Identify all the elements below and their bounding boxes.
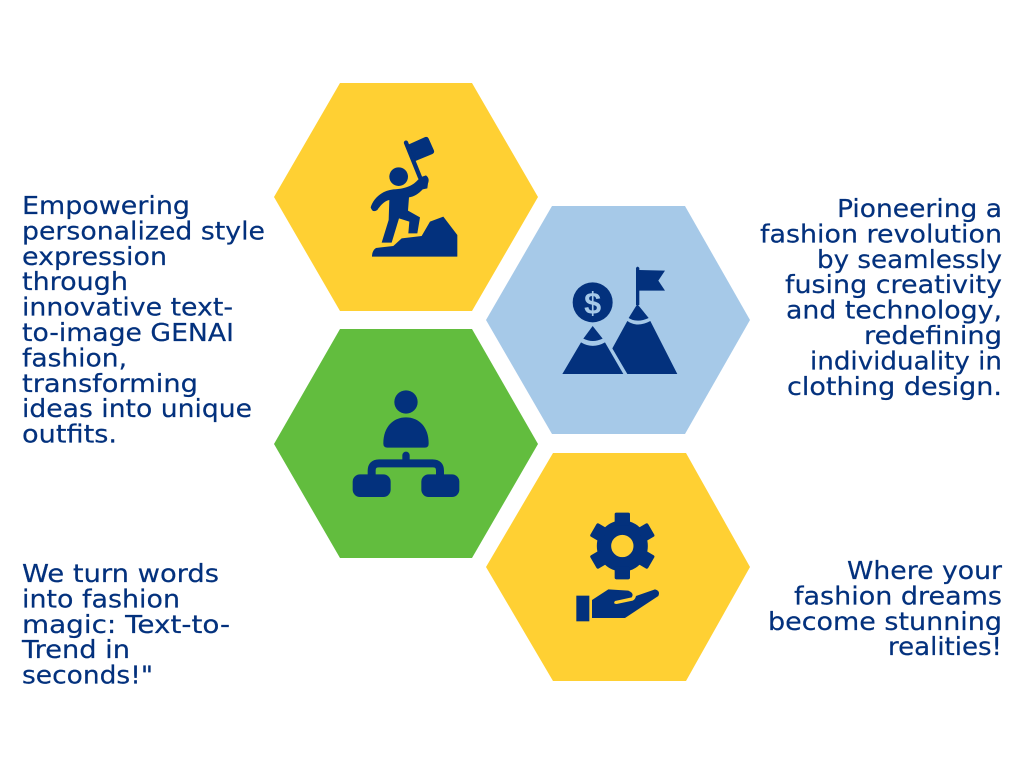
panel: top yellow hexagon with climber bbox=[274, 83, 538, 311]
icon: person climbing with flag bbox=[371, 137, 457, 257]
hexagon: top yellow bbox=[274, 83, 538, 311]
text block: where your fashion dreams: fashion dreams bbox=[794, 581, 1002, 610]
text block: empowering personalized style: innovative text- bbox=[22, 293, 233, 322]
hexagon: green bbox=[274, 329, 538, 558]
icon: mountains with flag and dollar coin bbox=[562, 267, 677, 374]
text block: where your fashion dreams bbox=[768, 556, 1003, 661]
text block: empowering personalized style: transforming bbox=[22, 369, 198, 398]
text block: empowering personalized style: through bbox=[22, 267, 128, 296]
text block: empowering personalized style: to-image GENAI bbox=[22, 318, 234, 347]
panel: blue hexagon with mountains bbox=[486, 206, 750, 434]
text block: empowering personalized style: personalized style bbox=[22, 216, 265, 245]
text block: we turn words into fashion magic: Trend in bbox=[21, 635, 130, 664]
text block: pioneering a fashion revolution: and technology, bbox=[786, 296, 1002, 325]
icon: gear over open hand bbox=[576, 513, 659, 621]
text block: empowering personalized style: fashion, bbox=[22, 343, 127, 372]
text block: pioneering a fashion revolution bbox=[760, 194, 1002, 401]
text block: pioneering a fashion revolution: redefining bbox=[864, 321, 1002, 350]
text block: pioneering a fashion revolution: clothing design. bbox=[787, 372, 1002, 401]
text block: pioneering a fashion revolution: fashion revolution bbox=[760, 219, 1002, 248]
text block: where your fashion dreams: realities! bbox=[888, 632, 1002, 661]
text block: empowering personalized style: Empowering bbox=[22, 191, 190, 220]
text block: pioneering a fashion revolution: by seamlessly bbox=[817, 245, 1002, 274]
text block: empowering personalized style: ideas into unique bbox=[22, 394, 252, 423]
text block: we turn words into fashion magic: We turn words bbox=[22, 559, 219, 588]
panel: green hexagon with hierarchy bbox=[274, 329, 538, 558]
hexagon: blue bbox=[486, 206, 750, 434]
text block: where your fashion dreams: become stunning bbox=[768, 607, 1002, 636]
icon: mountains with flag and dollar coin: $ bbox=[584, 286, 601, 320]
text block: pioneering a fashion revolution: individuality in bbox=[810, 346, 1002, 375]
text block: empowering personalized style: expression bbox=[22, 242, 167, 271]
text block: empowering personalized style bbox=[22, 191, 265, 449]
text block: we turn words into fashion magic: into fashion bbox=[22, 584, 180, 613]
text block: we turn words into fashion magic bbox=[21, 559, 230, 690]
text block: pioneering a fashion revolution: fusing creativity bbox=[785, 270, 1002, 299]
text block: where your fashion dreams: Where your bbox=[847, 556, 1003, 585]
panel: bottom yellow hexagon with gear and hand bbox=[486, 453, 750, 681]
text block: we turn words into fashion magic: magic: Text-to- bbox=[22, 610, 230, 639]
text block: empowering personalized style: outfits. bbox=[22, 420, 117, 449]
text block: we turn words into fashion magic: seconds!" bbox=[22, 661, 153, 690]
text block: pioneering a fashion revolution: Pioneering a bbox=[837, 194, 1002, 223]
icon: person above org chart bbox=[353, 390, 459, 497]
hexagon: bottom yellow bbox=[486, 453, 750, 681]
